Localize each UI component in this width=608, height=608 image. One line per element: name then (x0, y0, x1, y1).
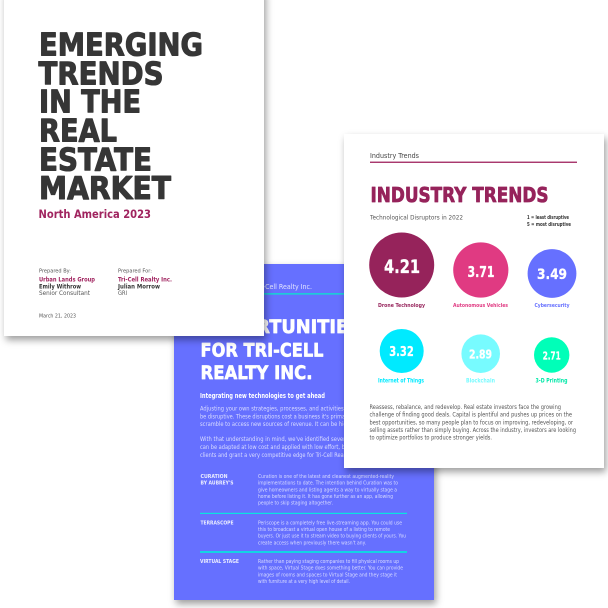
bubble: blockchain: 2.89 (469, 348, 492, 362)
cover title (38, 28, 203, 207)
row: curation: implementations to date. The intention behind Curation was to (258, 481, 398, 487)
bubble: drone technology: Drone Technology (378, 303, 425, 309)
row: terrascope: create access when previously there wasn't any. (258, 540, 366, 546)
panel: opportunities page (174, 264, 434, 600)
panel: industry trends page (344, 134, 604, 468)
date: March 21, 2023 (39, 314, 76, 320)
row: virtual stage: with furniture at a very high level of detail. (258, 579, 350, 585)
prepared for: Julian Morrow (117, 284, 161, 290)
heading: OPPORTUNITIES (200, 316, 361, 338)
prepared for: Prepared For: (118, 268, 152, 274)
cover title: IN THE (39, 84, 141, 120)
row: virtual stage (200, 559, 404, 585)
panel: cover page (4, 0, 264, 336)
legend: scale: 1 = least disruptive (527, 215, 569, 221)
prepared by: Senior Consultant (39, 291, 91, 297)
bubble: drone technology (369, 232, 434, 309)
page header: Industry Trends (370, 152, 419, 160)
legend: scale (527, 215, 571, 228)
row: curation: home before listing it. It has gone further as an app, allowing (258, 494, 393, 500)
cover title: MARKET (39, 171, 171, 207)
bubble: autonomous vehicles (453, 242, 509, 309)
bubble: internet of things: 3.32 (389, 345, 414, 360)
row: terrascope: Periscope is a completely free live-streaming app. You could use (258, 520, 403, 526)
body text (370, 404, 576, 442)
legend: scale: 5 = most disruptive (527, 222, 571, 228)
bubble: blockchain (461, 334, 500, 384)
prepared for (117, 268, 172, 297)
body text: to optimize portfolios to produce stronger yields. (370, 435, 492, 442)
heading: INDUSTRY TRENDS (370, 183, 548, 207)
cover subtitle: North America 2023 (38, 207, 151, 221)
bubble: internet of things: Internet of Things (378, 378, 424, 384)
heading: REALTY INC. (200, 362, 312, 384)
row: terrascope: this to broadcast a virtual open house of a listing to remote (258, 527, 391, 533)
bubble: cybersecurity: Cybersecurity (534, 303, 570, 309)
row: virtual stage: VIRTUAL STAGE (200, 559, 239, 565)
prepared by (39, 268, 95, 297)
prepared by: Urban Lands Group (39, 278, 95, 284)
bubble: cybersecurity (528, 249, 576, 309)
row: terrascope (200, 520, 406, 546)
intro text: can be adapted at low cost and applied with low effort, but (200, 444, 351, 451)
intro text: scramble to access new sources of revenue. It can be high (200, 421, 350, 428)
cover title: REAL (39, 114, 117, 150)
bubble: internet of things (378, 329, 424, 384)
bubble: drone technology: 4.21 (384, 257, 420, 278)
prepared for: GRI (118, 291, 127, 297)
intro text: Adjusting your own strategies, processes, and activities in (200, 406, 350, 412)
row: curation: give homeowners and listing agents a way to virtually stage a (258, 487, 397, 493)
heading: FOR TRI-CELL (200, 340, 324, 362)
prepared by: Emily Withrow (39, 284, 81, 290)
prepared by: Prepared By: (39, 268, 71, 274)
prepared for: Tri-Cell Realty Inc. (118, 278, 172, 284)
intro text: be disruptive. These disruptions cost a business it's primary (200, 413, 350, 420)
heading (200, 316, 361, 384)
chart subtitle: Technological Disruptors in 2022 (369, 214, 463, 222)
subheading: Integrating new technologies to get ahead (200, 392, 325, 400)
row: curation (200, 474, 398, 507)
intro text (200, 406, 351, 459)
row: curation: CURATION (200, 474, 228, 480)
row: curation: BY AUBREY'S (200, 480, 234, 486)
bubble: 3-d printing: 2.71 (543, 350, 561, 362)
row: terrascope: TERRASCOPE (200, 520, 234, 526)
row: virtual stage: images of rooms and spaces to Virtual Stage and they stage it (258, 572, 397, 578)
cover title: EMERGING (39, 28, 203, 64)
bubble: autonomous vehicles: 3.71 (468, 263, 494, 281)
body text: Reassess, rebalance, and redevelop. Real estate investors face the growing (370, 404, 561, 411)
bubble: autonomous vehicles: Autonomous Vehicles (453, 303, 509, 309)
row: curation: Curation is one of the latest and cleanest augmented-reality (258, 474, 395, 480)
row: virtual stage: with space, Virtual Stage does something better. You can provide (258, 566, 404, 572)
row: virtual stage: Rather than paying staging companies to fill physical rooms up (258, 559, 399, 565)
intro text: With that understanding in mind, we've identified several (200, 436, 350, 443)
row: curation: people to skip staging altogether. (258, 501, 333, 507)
bubble: blockchain: Blockchain (466, 378, 495, 384)
intro text: clients and grant a very competitive edge for Tri-Cell Realty (200, 452, 350, 459)
bubble: cybersecurity: 3.49 (537, 267, 567, 283)
page header: Opportunities for Tri-Cell Realty Inc. (200, 283, 312, 291)
bubble: 3-d printing: 3-D Printing (536, 378, 568, 384)
cover title: TRENDS (38, 56, 164, 92)
cover title: ESTATE (39, 142, 152, 178)
bubble: 3-d printing (534, 337, 569, 384)
